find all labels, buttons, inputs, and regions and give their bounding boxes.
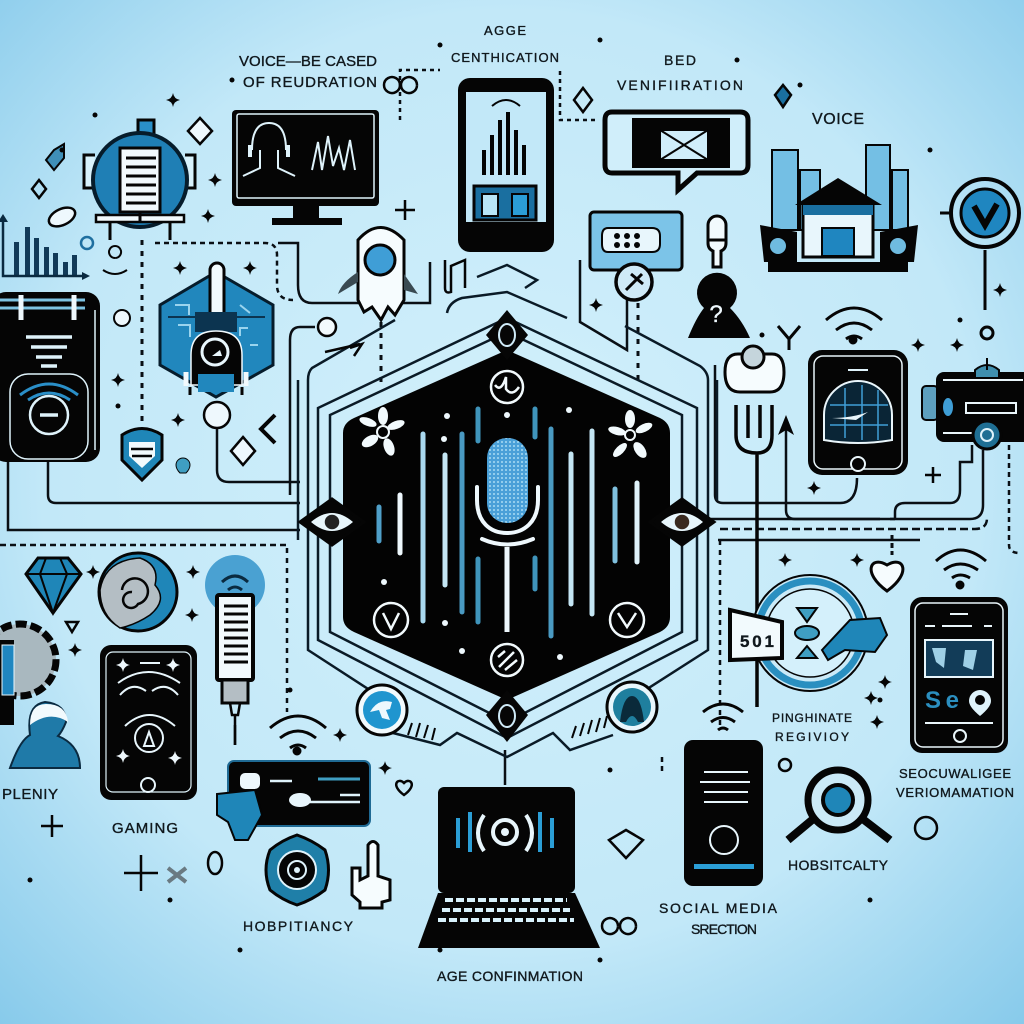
sound wave bars xyxy=(379,409,637,636)
label: gaming: GAMING xyxy=(112,820,178,837)
icon: keyhole person with question mark: ? xyxy=(709,301,723,328)
icon: magnifier xyxy=(788,770,890,840)
icon: hand pointing xyxy=(352,842,390,908)
icon: laptop xyxy=(418,787,600,948)
icon: right eye xyxy=(650,499,714,545)
icon: swirl globe xyxy=(99,553,177,631)
icon: blue hexagon with lock device xyxy=(160,263,273,397)
icon: left device panel xyxy=(0,292,100,462)
heading: voice based: OF REUDRATION xyxy=(243,74,377,91)
heading: voice based xyxy=(239,53,377,91)
heading: age centification: CENTHICATION xyxy=(451,50,559,65)
icon: wifi top right xyxy=(826,308,882,343)
icon: phone gaming xyxy=(100,645,197,800)
label: social media section: SOCIAL MEDIA xyxy=(659,900,778,916)
icon: capsule pin xyxy=(708,216,726,267)
label: pinchinate recivory xyxy=(772,711,852,744)
label: surveillance verification: VERIOMAMATION xyxy=(896,785,1014,800)
icon: keyhole person with question mark xyxy=(688,273,750,338)
heading: bed verification: VENIFIIRATION xyxy=(617,77,743,93)
icon: left eye xyxy=(300,499,364,545)
heading: age centification xyxy=(451,23,559,65)
microphone xyxy=(477,438,538,632)
icon: y antenna xyxy=(778,326,800,350)
icon: right machine xyxy=(922,358,1024,449)
icon: monitor with headset xyxy=(232,110,379,225)
label: pinchinate recivory: PINGHINATE xyxy=(772,711,852,725)
icon: bar chart small xyxy=(0,214,90,280)
icon: 501 sign with hand xyxy=(730,575,887,691)
icon: card reader with hand xyxy=(217,761,370,840)
label: surveillance verification: SEOCUWALIGEE xyxy=(899,766,1011,781)
heading: voice based: VOICE—BE CASED xyxy=(239,53,377,70)
heading: bed verification: BED xyxy=(664,52,696,68)
icon: left person and wheel xyxy=(0,624,80,768)
icon: phone right lower: Se xyxy=(925,687,959,714)
icon: speech bubble keypad xyxy=(590,212,682,300)
icon: wifi right xyxy=(936,550,986,588)
heading: age centification: AGGE xyxy=(484,23,526,38)
icon: wifi bottom middle xyxy=(703,704,743,730)
icon: blue circle left xyxy=(357,685,435,740)
icon: city with building xyxy=(760,145,918,272)
icon: 501 sign with hand: 501 xyxy=(740,632,774,651)
icon: fork xyxy=(736,405,772,707)
icon: cloud bubble xyxy=(725,346,784,392)
icon: globe with document xyxy=(84,120,195,240)
icon: diamond xyxy=(26,558,81,613)
circuit connector lines xyxy=(0,70,1020,785)
icon: phone right lower xyxy=(910,597,1008,753)
icon: ghost pendant xyxy=(338,228,418,320)
flower icons xyxy=(358,407,654,460)
icon: wifi lower left xyxy=(270,716,326,754)
label: social media section xyxy=(659,900,778,937)
icon: phone with map xyxy=(808,350,908,475)
icon: horizontal phone with envelope xyxy=(605,112,748,190)
heading: bed verification xyxy=(617,52,743,93)
dots xyxy=(381,407,572,660)
icon: phone social xyxy=(684,740,763,886)
icon: phone with bar chart xyxy=(458,78,554,252)
label: pinchinate recivory: REGIVIOY xyxy=(775,730,849,744)
check circles xyxy=(374,371,644,676)
icon: bottom badge xyxy=(486,690,528,742)
icon: blue circle right xyxy=(572,682,657,738)
icon: right shield target xyxy=(940,179,1019,339)
label: plenty: PLENIY xyxy=(2,786,58,803)
icon: barcode scanner xyxy=(205,555,265,745)
panel: central hexagon with voice microphone xyxy=(343,350,670,700)
label: hospitality: HOBSITCALTY xyxy=(788,857,889,873)
icon: heart right xyxy=(871,562,903,591)
heading: voice: VOICE xyxy=(812,111,864,128)
label: hospitiancy: HOBPITIANCY xyxy=(243,918,354,934)
label: social media section: SRECTION xyxy=(691,921,757,937)
icon: top badge xyxy=(486,310,528,360)
icon: flower badge xyxy=(266,835,328,905)
concentric hexagon frame lines xyxy=(298,265,717,757)
arrow: up xyxy=(778,415,794,435)
icon: blue shield xyxy=(122,428,162,480)
label: surveillance verification xyxy=(896,766,1014,800)
small decorative symbols xyxy=(32,77,941,934)
label: age confirmation: AGE CONFINMATION xyxy=(437,968,583,984)
